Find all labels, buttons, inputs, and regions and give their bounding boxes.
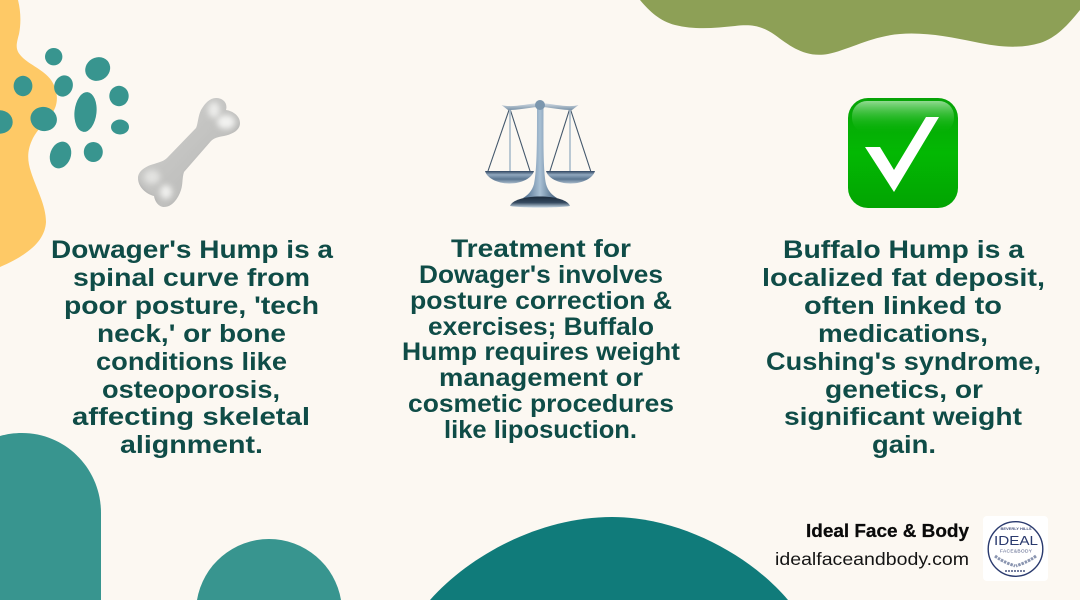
text: Dowager's Hump description: [51, 236, 334, 459]
text: Dowager's Hump description: affecting skeletal: [72, 403, 310, 431]
brand name: Ideal Face & Body: [806, 521, 969, 541]
text: Buffalo Hump description: significant weight: [784, 403, 1023, 431]
text: treatment description: Hump requires weight: [402, 338, 681, 366]
text: treatment description: cosmetic procedures: [408, 390, 674, 418]
icon: bone: [138, 98, 240, 207]
text: treatment description: like liposuction.: [444, 416, 637, 444]
decorative green wave: [640, 0, 1080, 55]
text: Dowager's Hump description: Dowager's Hump is a: [51, 236, 334, 264]
text: Buffalo Hump description: genetics, or: [825, 376, 983, 404]
decorative yellow blob: [0, 0, 57, 267]
icon: balance scales: [485, 100, 595, 208]
logo badge: [983, 516, 1048, 581]
text: Buffalo Hump description: Buffalo Hump is a: [783, 236, 1025, 264]
text: Dowager's Hump description: neck,' or bone: [97, 320, 286, 348]
text: Buffalo Hump description: Cushing's syndrome,: [766, 348, 1041, 376]
text: treatment description: Treatment for: [451, 235, 631, 263]
text: Buffalo Hump description: localized fat deposit,: [762, 264, 1045, 292]
text: Buffalo Hump description: gain.: [872, 431, 936, 459]
decorative teal arch, left: [0, 433, 101, 600]
logo badge: BEVERLY HILLS: [1000, 526, 1032, 531]
text: treatment description: [402, 235, 681, 444]
logo badge: IDEAL: [994, 534, 1038, 548]
text: treatment description: management or: [439, 364, 643, 392]
text: Dowager's Hump description: conditions like: [96, 348, 287, 376]
decorative teal dome, large: [430, 517, 788, 600]
text: treatment description: Dowager's involves: [419, 261, 663, 289]
text: Dowager's Hump description: spinal curve from: [73, 264, 310, 292]
text: Dowager's Hump description: alignment.: [120, 431, 263, 459]
decorative teal dome, middle: [197, 539, 341, 600]
text: Buffalo Hump description: often linked to: [804, 292, 1002, 320]
text: Dowager's Hump description: osteoporosis,: [102, 376, 280, 404]
text: treatment description: exercises; Buffalo: [428, 313, 654, 341]
text: Dowager's Hump description: poor posture, 'tech: [64, 292, 319, 320]
teal dots cluster: [0, 48, 129, 171]
logo badge: FACE&BODY: [1000, 548, 1033, 554]
icon: green check mark: [848, 98, 958, 208]
website url: idealfaceandbody.com: [775, 549, 969, 569]
text: Buffalo Hump description: medications,: [818, 320, 988, 348]
text: Buffalo Hump description: [762, 236, 1045, 459]
text: treatment description: posture correction &: [410, 287, 672, 315]
